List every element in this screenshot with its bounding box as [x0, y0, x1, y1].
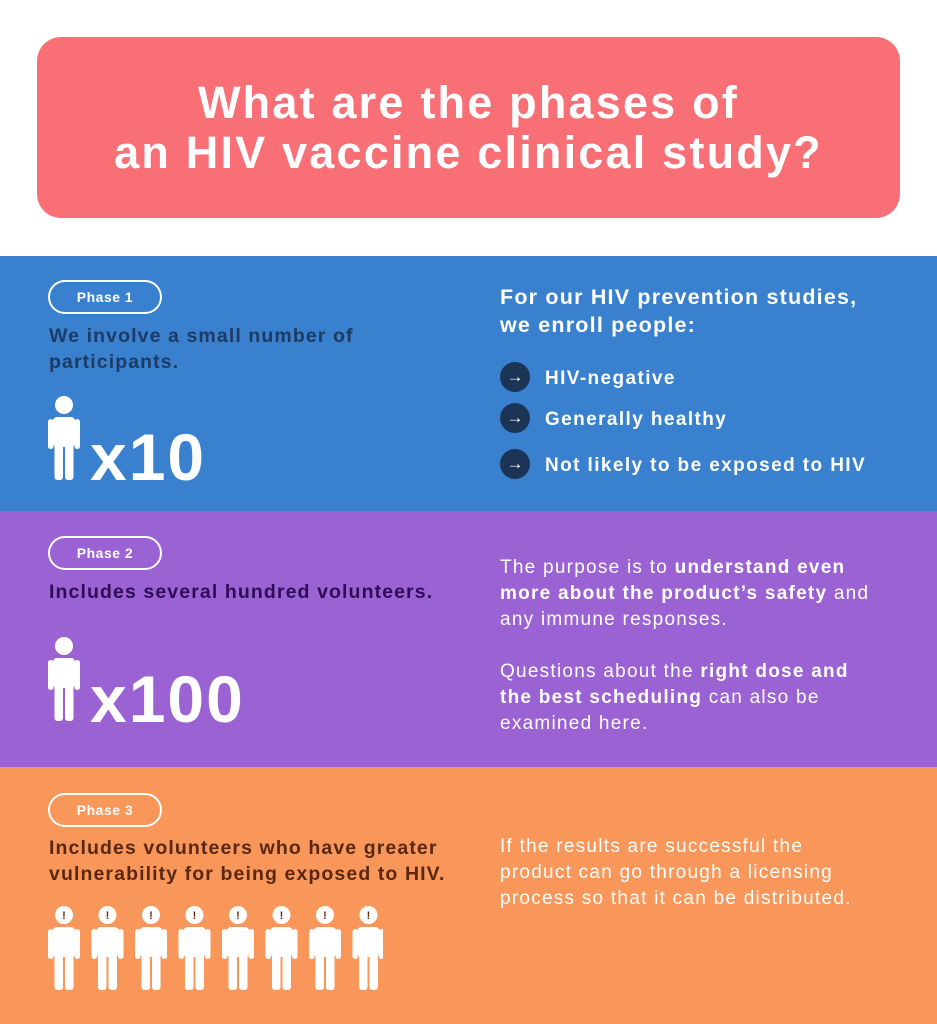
heading: phase 1: [49, 325, 354, 373]
purpose text: The purpose is to understand even: [500, 557, 845, 578]
bullet list: →: [506, 367, 524, 386]
icon: person: [48, 637, 80, 721]
heading: phase 3: [49, 837, 446, 885]
title: [37, 37, 900, 218]
icons: eight people: !: [149, 910, 153, 922]
heading: phase 3: Includes volunteers who have greater: [49, 837, 438, 859]
icons: eight people: !: [236, 910, 240, 922]
panel: phase 3: [0, 767, 937, 1024]
purpose text: any immune responses.: [500, 609, 728, 630]
bullet list: →: [506, 454, 524, 473]
pill: phase 1: [48, 280, 162, 314]
enrollment heading: For our HIV prevention studies,: [500, 285, 857, 309]
bullet list: [500, 362, 866, 479]
licensing text: process so that it can be distributed.: [500, 888, 852, 909]
icons: eight people: !: [62, 910, 66, 922]
heading: phase 1: participants.: [49, 351, 179, 373]
icons: eight people: !: [280, 910, 283, 922]
icons: eight people: [48, 906, 383, 990]
purpose text: examined here.: [500, 713, 648, 734]
icons: eight people: !: [323, 910, 327, 922]
licensing text: If the results are successful the: [500, 836, 803, 857]
bullet list: Generally healthy: [545, 409, 727, 430]
pill: phase 2: Phase 2: [77, 545, 133, 561]
licensing text: product can go through a licensing: [500, 862, 833, 883]
panel: phase 2: [0, 511, 937, 767]
icon: person: [48, 396, 80, 480]
icons: eight people: !: [106, 910, 109, 922]
pill: phase 3: Phase 3: [77, 802, 133, 818]
icons: eight people: !: [193, 910, 196, 922]
purpose text: Questions about the right dose and: [500, 661, 849, 682]
purpose text: [500, 557, 869, 734]
icons: eight people: !: [367, 910, 370, 922]
count x100: x100: [90, 662, 245, 736]
pill: phase 3: [48, 793, 162, 827]
licensing text: [500, 836, 852, 909]
pill: phase 1: Phase 1: [77, 289, 133, 305]
purpose text: the best scheduling can also be: [500, 687, 820, 708]
bullet list: →: [506, 408, 524, 427]
heading: phase 2: Includes several hundred volunteers.: [49, 581, 433, 603]
title: an HIV vaccine clinical study?: [114, 127, 823, 178]
bullet list: HIV-negative: [545, 368, 676, 389]
pill: phase 2: [48, 536, 162, 570]
bullet list: Not likely to be exposed to HIV: [545, 455, 866, 476]
title: What are the phases of: [198, 77, 739, 128]
enrollment heading: we enroll people:: [500, 313, 696, 337]
enrollment heading: [500, 285, 857, 337]
count x10: x10: [90, 420, 206, 494]
panel: phase 1: [0, 256, 937, 511]
purpose text: more about the product’s safety and: [500, 583, 869, 604]
heading: phase 1: We involve a small number of: [49, 325, 354, 347]
heading: phase 3: vulnerability for being exposed to HIV.: [49, 863, 446, 885]
